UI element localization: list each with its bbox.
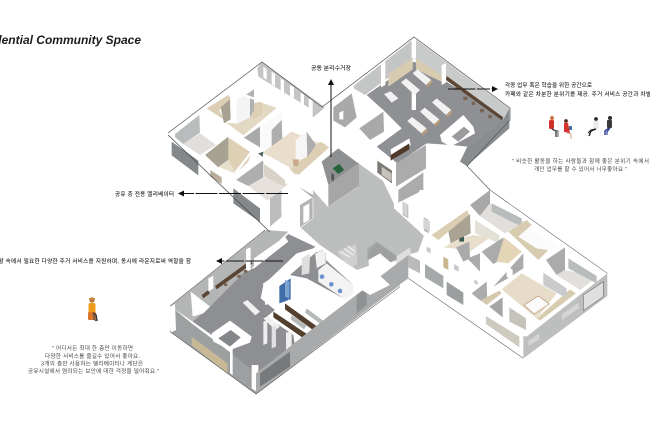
person 4 (605, 116, 612, 135)
balcony strip (257, 62, 325, 117)
person 2 (564, 119, 572, 139)
laundry room (290, 252, 353, 297)
kitchen block (308, 292, 332, 327)
bar counter (446, 76, 503, 120)
person 1 (549, 116, 558, 137)
kitchen unit (508, 220, 548, 260)
glass walls (353, 38, 414, 100)
wing: upper left residential units (172, 62, 359, 227)
columns (412, 38, 416, 58)
wide low windows (486, 316, 519, 347)
washing machines (318, 263, 353, 299)
west lobby block (281, 183, 313, 228)
recessed balcony windows (408, 255, 420, 273)
lower room (236, 160, 263, 186)
living room (489, 297, 503, 317)
columns (170, 304, 176, 333)
middle unit (243, 125, 260, 147)
elevator lobby box (270, 190, 282, 227)
wood alcove (472, 282, 487, 303)
lobby doors (403, 202, 408, 218)
work tables (413, 69, 431, 85)
white landing (318, 245, 390, 295)
icon: four seated people (549, 116, 612, 139)
lounge table (243, 300, 260, 315)
sofa nook (212, 321, 252, 350)
door recess (377, 158, 396, 187)
wing: lower left lounge and laundry (170, 230, 400, 394)
label: elevator: 공유 층 전용 엘리베이터 (115, 190, 174, 198)
arrow: left to lounge note (216, 258, 283, 264)
stools (224, 283, 227, 286)
wood wall panels (388, 58, 413, 87)
small wall windows (443, 257, 448, 270)
white wall end (254, 237, 288, 268)
partition walls (202, 112, 290, 183)
label: recycling: 공동 분리수거장 (311, 64, 351, 72)
wing: right residential units (380, 190, 607, 358)
quote: resident elevator: " 어디서든 최대 한 층만 이동하면 (52, 344, 133, 352)
bar counter (215, 261, 253, 289)
quote: resident elevator: 다양한 서비스를 즐길수 있어서 좋아요. (45, 352, 140, 360)
glass wall south (460, 108, 509, 166)
arrow: left to elevator note (178, 190, 288, 196)
person 3 (588, 117, 598, 136)
quote: resident elevator: 공유시설에서 염려되는 보안에 대한 걱정을 덜어줘요." (28, 367, 159, 375)
stairs (337, 244, 357, 268)
arrow: up to recycling (328, 79, 334, 157)
central plaza floor (300, 163, 424, 270)
recycling room (322, 148, 358, 185)
building base silhouette (168, 37, 607, 394)
quote: resident elevator (28, 344, 159, 375)
south west white wall (408, 237, 523, 358)
west white wall (191, 292, 210, 317)
north wall (170, 230, 288, 322)
west room with window wall (175, 115, 200, 144)
grey wall north of plaza (396, 145, 426, 187)
chairs (426, 80, 433, 87)
stair room top (415, 190, 463, 222)
top corridor room (470, 190, 490, 216)
end room (546, 247, 565, 275)
lounge floor (193, 234, 317, 383)
south west glass wall (170, 308, 256, 394)
label: lounge description: 각종 업무 혹은 학습을 위한 공간으로 (505, 81, 592, 89)
stair well guard (367, 242, 396, 262)
dining room (502, 273, 557, 318)
upper wood room (207, 95, 231, 119)
quote: resident elevator: 3개의 층만 사용하는 엘리베이터나 계단은 (41, 360, 143, 368)
south east glass wall (256, 262, 400, 394)
sofa nook (440, 115, 475, 147)
arrow: right to lounge note (448, 86, 498, 92)
quote: work lounge: 개인 업무를 할 수 있어서 너무좋아요 " (534, 165, 627, 173)
south end wall (523, 273, 607, 358)
bar stools (455, 87, 458, 90)
stair well pocket (368, 243, 397, 265)
icon: seated person on suitcase (88, 297, 97, 321)
exterior windows (172, 142, 198, 175)
glass corner by the stair well (380, 255, 408, 298)
label: lounge description (505, 81, 650, 98)
wood closet room (205, 137, 229, 167)
label: lounge description: 카페와 같은 차분한 분위기를 제공, 주거 서비스 공간과 차별 (505, 90, 650, 98)
lounge floor (367, 62, 505, 163)
plaza rooms, lobby walls and stairs (281, 145, 440, 270)
wing: upper right work lounge (333, 38, 509, 166)
quote: work lounge: " 비슷한 활동을 하는 사람들과 함께 좋은 분위기 속에서 (512, 157, 649, 165)
outer wall outline (168, 37, 510, 190)
central closet (482, 237, 503, 264)
isometric floor plan (168, 37, 607, 394)
white partition fins (263, 320, 267, 345)
counter (391, 138, 411, 161)
quote: work lounge (512, 157, 649, 173)
wood unit north (432, 210, 471, 240)
lobby white faces (394, 170, 440, 235)
restroom (333, 93, 357, 127)
